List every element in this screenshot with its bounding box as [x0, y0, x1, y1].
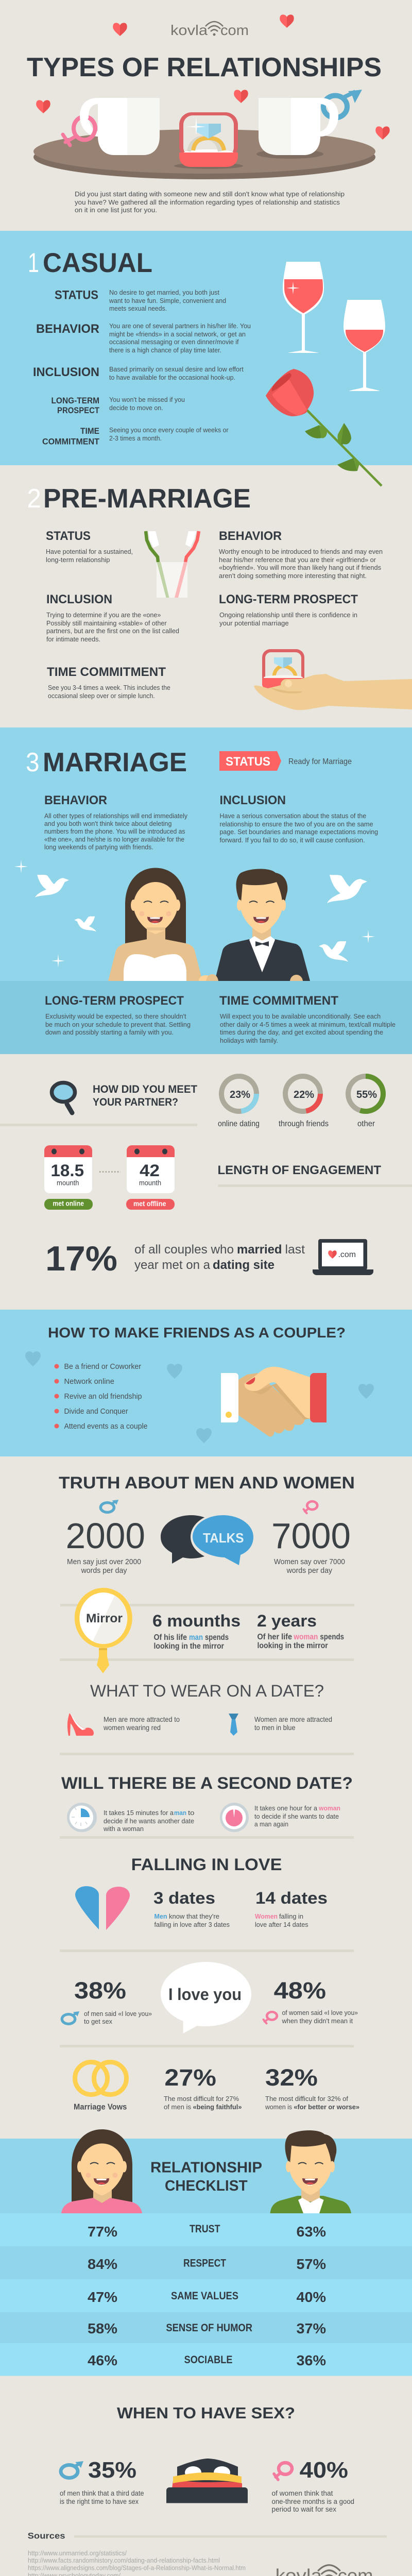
stat: women 7000: Women say over 7000 — [274, 1557, 345, 1566]
casual time commitment: COMMITMENT — [42, 437, 100, 446]
row: sociable: SOCIABLE — [184, 2354, 233, 2366]
label: marriage vows: Marriage Vows — [74, 2103, 127, 2111]
female symbol — [63, 116, 95, 145]
stat: 32%: The most difficult for 32% of — [265, 2095, 348, 2103]
casual long-term prospect: decide to move on. — [109, 404, 163, 412]
icon: split heart — [75, 1886, 130, 1930]
intro text — [75, 190, 345, 214]
row: sense of humor: 37% — [297, 2320, 326, 2336]
marriage inclusion: relationship to ensure the two of you are on the same — [219, 820, 373, 828]
casual inclusion: INCLUSION — [33, 365, 99, 379]
list: ways to make friends: Be a friend or Coworker — [64, 1362, 141, 1371]
bride illustration — [108, 868, 211, 981]
decorative hearts — [36, 14, 390, 140]
donut: through friends 22%: through friends — [279, 1120, 329, 1128]
stat: 32%: «for better or worse» — [294, 2103, 359, 2111]
panel: how to make friends — [0, 1310, 412, 1456]
icon: clock 15 minutes — [67, 1803, 97, 1832]
male symbol — [323, 90, 362, 117]
casual long-term prospect: LONG-TERM — [52, 396, 99, 405]
heading: relationship checklist — [150, 2160, 262, 2194]
speech bubbles: talks — [161, 1513, 255, 1565]
pre-marriage inclusion: Possibly still maintaining «stable» of other — [46, 619, 167, 627]
icon: clock one hour — [220, 1803, 249, 1832]
calendar: met offline: 42 — [140, 1161, 160, 1180]
status tag: Ready for Marriage — [288, 757, 352, 766]
row: trust: TRUST — [190, 2223, 220, 2235]
icon: male small — [100, 1500, 118, 1512]
stat: women 7000: 7000 — [271, 1516, 351, 1556]
sources: http://www.facts.randomhistory.com/dating-and-relationship-facts.html — [28, 2556, 220, 2564]
groom illustration — [206, 869, 310, 981]
pre-marriage inclusion: INCLUSION — [46, 592, 112, 606]
stat: 17% married: 17% — [45, 1239, 117, 1278]
stat: 14 dates: falling in — [279, 1912, 303, 1920]
icon: magnifier — [52, 1083, 75, 1113]
stat: 14 dates — [255, 1889, 328, 1928]
stat: women 48%: 48% — [274, 1977, 326, 2004]
marriage behavior — [44, 793, 187, 851]
logo: kovla.com header: com — [220, 22, 249, 38]
heading: pre-marriage: 2 — [27, 484, 41, 514]
panel: falling in love — [75, 1855, 328, 1930]
text: men attracted to red: women wearing red — [103, 1723, 161, 1732]
text: man 15 minutes: decide if he wants another date — [104, 1817, 194, 1825]
sources — [28, 2531, 387, 2576]
pre-marriage behavior: hear his/her reference that you are their «girlfriend» or — [219, 556, 376, 564]
stat: men 35%: of men think that a third date — [60, 2489, 144, 2497]
casual inclusion — [33, 365, 244, 381]
donut: through friends 22% — [279, 1076, 329, 1128]
pre-marriage behavior: BEHAVIOR — [219, 529, 282, 543]
icon: wine glass full — [283, 262, 324, 353]
casual time commitment — [42, 426, 229, 446]
marriage time commitment: holidays with family. — [220, 1037, 278, 1044]
heading: falling in love: FALLING IN LOVE — [131, 1855, 282, 1874]
logo: kovla.com header — [170, 22, 249, 38]
panel: truth about men and women — [59, 1473, 355, 1575]
pre-marriage behavior: «boyfriend». You will more than likely hang out if friends — [219, 564, 381, 571]
list: ways to make friends: Divide and Conquer — [64, 1407, 128, 1416]
sources: Sources — [28, 2531, 65, 2541]
stat: 3 dates — [153, 1889, 230, 1928]
icon: female small — [304, 1501, 317, 1513]
panel: marriage — [0, 727, 412, 1054]
stat: 14 dates: love after 14 dates — [255, 1921, 308, 1928]
status tag — [219, 751, 352, 771]
row: trust: 63% — [297, 2224, 326, 2240]
marriage time commitment — [219, 994, 396, 1044]
pre-marriage inclusion: partners, but are the first one on the list called — [46, 627, 179, 635]
title: TYPES OF RELATIONSHIPS — [27, 53, 382, 82]
pre-marriage inclusion: Trying to determine if you are the «one» — [46, 611, 161, 619]
donut: other 55%: 55% — [356, 1089, 377, 1100]
man portrait — [270, 2130, 351, 2213]
stat: 2 years: woman — [294, 1633, 318, 1641]
pre-marriage time commitment: See you 3-4 times a week. This includes the — [48, 684, 170, 691]
casual long-term prospect — [52, 396, 185, 415]
marriage behavior: All other types of relationships will end immediately — [44, 812, 187, 820]
pre-marriage time commitment: TIME COMMITMENT — [47, 665, 166, 679]
stat: 6 mounths: Of his life — [153, 1633, 187, 1642]
text: man 15 minutes: to — [188, 1809, 195, 1817]
speech bubble: i love you — [161, 1962, 251, 2033]
stat: 14 dates: 14 dates — [255, 1889, 328, 1907]
icon: laptop — [313, 1239, 373, 1275]
heading: casual: 1 — [28, 248, 39, 278]
donut: online dating 23%: online dating — [218, 1120, 260, 1128]
stat: women 7000 — [271, 1516, 351, 1575]
row: same values: 47% — [88, 2289, 117, 2305]
heading: truth: TRUTH ABOUT MEN AND WOMEN — [59, 1473, 355, 1492]
heading: second date: WILL THERE BE A SECOND DATE? — [61, 1774, 353, 1792]
pre-marriage long-term prospect: Ongoing relationship until there is confidence in — [219, 611, 357, 619]
stat: 3 dates: Men — [154, 1912, 167, 1920]
stat: 6 mounths: spends — [205, 1633, 229, 1642]
icon: bed — [166, 2459, 248, 2503]
stat: men 38% — [62, 1977, 152, 2025]
casual status: STATUS — [55, 289, 98, 302]
stat: 27%: The most difficult for 27% — [164, 2095, 239, 2103]
stat: 27%: «being faithful» — [193, 2103, 242, 2111]
pre-marriage time commitment: occasional sleep over or simple lunch. — [48, 692, 155, 700]
casual status: want to have fun. Simple, convenient and — [109, 297, 226, 304]
pre-marriage long-term prospect — [219, 592, 358, 627]
stat: women 48%: of women said «I love you» — [282, 2009, 358, 2016]
marriage inclusion: forward. If you fail to do so, it will cause confusion. — [219, 836, 365, 844]
stat: 6 mounths — [152, 1612, 241, 1651]
marriage time commitment: other daily or 4-5 times a week at minimum, text/call multiple — [220, 1021, 396, 1028]
stat: 27% — [164, 2064, 242, 2111]
icon: toothbrushes in glass — [146, 531, 199, 598]
casual time commitment: 2-3 times a month. — [109, 434, 162, 442]
text: man 15 minutes: man — [174, 1809, 186, 1817]
woman portrait — [61, 2129, 142, 2213]
text: woman one hour: woman — [318, 1804, 340, 1812]
pre-marriage behavior: aren't doing something more interesting that night. — [219, 572, 367, 580]
calendar: met online: 18.5 — [50, 1161, 84, 1180]
row: same values: SAME VALUES — [171, 2290, 238, 2302]
text: woman one hour — [254, 1804, 340, 1828]
pre-marriage inclusion: for intimate needs. — [46, 635, 100, 643]
sources: http://www.unmarried.org/statistics/ — [28, 2549, 127, 2557]
intro text: you have? We gathered all the information regarding types of relationship and statistics — [75, 198, 340, 206]
pre-marriage long-term prospect: LONG-TERM PROSPECT — [219, 592, 358, 606]
text: men attracted to red — [103, 1715, 180, 1732]
speech bubbles: talks: TALKS — [203, 1530, 244, 1546]
marriage time commitment: TIME COMMITMENT — [219, 994, 338, 1008]
stat: 32% — [265, 2064, 359, 2111]
marriage inclusion: Have a serious conversation about the status of the — [219, 812, 366, 820]
row: sense of humor: SENSE OF HUMOR — [166, 2322, 252, 2334]
panel: pre-marriage — [27, 484, 412, 710]
icon: blue tie — [229, 1714, 238, 1736]
stat: 27%: 27% — [164, 2064, 216, 2091]
stat: women 40%: one-three months is a good — [272, 2498, 354, 2505]
pre-marriage status — [46, 529, 133, 564]
stat: 32%: 32% — [265, 2064, 318, 2091]
heading: make friends: HOW TO MAKE FRIENDS AS A COUPLE? — [48, 1325, 346, 1341]
pre-marriage status: long-term relationship — [46, 556, 110, 564]
marriage behavior: numbers from the phone. You will be introduced as — [44, 827, 185, 835]
stat: men 2000: 2000 — [66, 1516, 145, 1556]
row: sense of humor — [0, 2312, 412, 2343]
marriage time commitment: Will expect you to be available unconditionally. See each — [220, 1012, 381, 1020]
panel: how did you meet — [0, 1076, 383, 1128]
marriage inclusion: INCLUSION — [219, 793, 286, 807]
pre-marriage inclusion — [46, 592, 179, 643]
stat: men 2000 — [66, 1516, 145, 1575]
marriage behavior: long weekends of partying with friends. — [44, 843, 153, 851]
text: woman one hour: It takes one hour for a — [254, 1804, 318, 1812]
icon: mirror — [75, 1588, 134, 1673]
heading: relationship checklist: CHECKLIST — [165, 2178, 248, 2194]
heading: how did you meet: HOW DID YOU MEET — [93, 1083, 197, 1095]
text: men attracted to red: Men are more attracted to — [104, 1715, 180, 1723]
pre-marriage status: Have potential for a sustained, — [46, 548, 133, 555]
row: sociable — [0, 2343, 412, 2376]
stat: 27%: of men is — [164, 2103, 191, 2111]
marriage long-term prospect: Exclusivity would be expected, so there shouldn't — [45, 1012, 186, 1020]
calendar: met offline: met offline — [133, 1199, 166, 1208]
pre-marriage long-term prospect: your potential marriage — [219, 619, 289, 627]
stat: women 48% — [264, 1977, 358, 2025]
stat: 6 mounths: man — [189, 1633, 203, 1642]
marriage time commitment: times during the day, and get excited about spending the — [220, 1028, 383, 1036]
heading: relationship checklist: RELATIONSHIP — [150, 2160, 262, 2176]
stat: 3 dates: falling in love after 3 dates — [154, 1921, 230, 1928]
intro text: on it in one list just for you. — [75, 206, 157, 214]
icon: hand holding ring box — [254, 649, 412, 710]
row: trust — [0, 2213, 412, 2246]
panel: relationship checklist — [0, 2129, 412, 2376]
text: woman one hour: a man again — [254, 1820, 288, 1828]
faint hearts — [25, 1351, 374, 1443]
stat: 3 dates: know that they're — [169, 1912, 219, 1920]
pre-marriage behavior — [219, 529, 383, 580]
stat: 14 dates: Women — [255, 1912, 278, 1920]
sources: https://www.alignedsigns.com/blog/Stages-of-a-Relationship-What-is-Normal.htm — [28, 2564, 246, 2572]
pre-marriage behavior: Worthy enough to be introduced to friends and may even — [219, 548, 383, 555]
casual behavior: occasional messaging or even dinner/movie if — [109, 338, 239, 346]
row: sociable: 36% — [297, 2352, 326, 2368]
casual behavior: might be «friends» in a social network, or get an — [109, 330, 246, 338]
donut: other 55% — [348, 1076, 383, 1128]
casual behavior: You are one of several partners in his/her life. You — [109, 322, 251, 330]
panel: marriage vows — [74, 2062, 359, 2111]
dotted connector — [99, 1171, 121, 1173]
table — [33, 129, 375, 179]
heading: casual: CASUAL — [43, 248, 152, 278]
list: ways to make friends: Attend events as a couple — [64, 1422, 147, 1431]
stat: 2 years: looking in the mirror — [258, 1641, 328, 1650]
icon: wine glass half — [344, 300, 385, 391]
panel: length of engagement — [44, 1145, 412, 1210]
stat: 17% married — [45, 1239, 373, 1278]
stat: 6 mounths: looking in the mirror — [153, 1642, 224, 1651]
row: same values — [0, 2279, 412, 2312]
row: respect: 84% — [88, 2256, 117, 2272]
casual time commitment: Seeing you once every couple of weeks or — [109, 426, 229, 434]
stat: women 7000: words per day — [286, 1566, 332, 1575]
illustration: table with mugs and ring — [33, 90, 375, 179]
calendar: met online: mounth — [57, 1179, 79, 1187]
text: man 15 minutes: with a woman — [103, 1825, 144, 1833]
donut: other 55%: other — [357, 1120, 375, 1128]
text: man 15 minutes — [103, 1809, 195, 1833]
panel: casual — [0, 231, 412, 465]
stat: 17% married: last — [285, 1243, 305, 1257]
text: women attracted to blue — [254, 1715, 332, 1732]
heading: marriage: 3 — [26, 748, 39, 777]
logo: kovla.com header: kovla — [170, 22, 208, 38]
casual status — [55, 289, 226, 312]
icon: red shoe — [67, 1713, 94, 1736]
heading: how did you meet: YOUR PARTNER? — [93, 1096, 178, 1108]
stat: men 38%: of men said «I love you» — [84, 2010, 152, 2018]
right mug — [256, 98, 338, 159]
donut: online dating 23%: 23% — [230, 1089, 250, 1100]
pre-marriage time commitment — [47, 665, 170, 700]
panel: what to wear — [67, 1682, 332, 1736]
casual status: meets sexual needs. — [109, 304, 167, 312]
row: same values: 40% — [297, 2289, 326, 2305]
stat: men 35%: is the right time to have sex — [60, 2498, 139, 2505]
marriage behavior: «the one», and he/she is no longer available for the — [44, 836, 184, 843]
stat: 17% married: year met on a — [134, 1258, 211, 1272]
casual long-term prospect: You won't be missed if you — [109, 396, 185, 403]
stat: 3 dates: 3 dates — [153, 1889, 215, 1907]
logo: kovla.com footer — [276, 2565, 373, 2576]
heading: what to wear: WHAT TO WEAR ON A DATE? — [90, 1682, 324, 1700]
icon: rose — [266, 369, 382, 486]
doves and sparkles — [14, 860, 375, 968]
list: ways to make friends: Revive an old friendship — [64, 1392, 142, 1401]
heading: when to have sex: WHEN TO HAVE SEX? — [117, 2404, 295, 2422]
calendar: met online — [44, 1145, 93, 1210]
heading: marriage: MARRIAGE — [43, 748, 187, 777]
marriage long-term prospect: LONG-TERM PROSPECT — [45, 994, 184, 1008]
list: ways to make friends — [55, 1362, 147, 1431]
row: sociable: 46% — [88, 2352, 117, 2368]
casual long-term prospect: PROSPECT — [57, 405, 100, 415]
stat: women 40%: 40% — [300, 2458, 348, 2483]
stat: 6 mounths: 6 mounths — [152, 1612, 241, 1630]
panel: second date — [61, 1774, 353, 1833]
marriage long-term prospect — [45, 994, 191, 1036]
calendar: met online: met online — [53, 1199, 84, 1208]
panel: mirror — [75, 1588, 344, 1673]
marriage inclusion — [219, 793, 378, 844]
casual behavior — [36, 322, 251, 354]
calendar: met offline — [126, 1145, 175, 1210]
stat: men 2000: words per day — [81, 1566, 127, 1575]
donut: through friends 22%: 22% — [294, 1089, 314, 1100]
row: respect: RESPECT — [183, 2258, 226, 2269]
heading: how did you meet — [93, 1083, 197, 1108]
stat: 17% married: of all couples who — [134, 1243, 234, 1257]
text: women attracted to blue: to men in blue — [254, 1723, 296, 1732]
speech bubble: i love you: I love you — [168, 1985, 242, 2004]
list: ways to make friends: Network online — [64, 1377, 114, 1386]
stat: 2 years: spends — [320, 1633, 344, 1641]
marriage long-term prospect: down and possibly starting a family with you. — [45, 1028, 174, 1036]
stat: women 40%: of women think that — [272, 2489, 333, 2497]
donut: online dating 23% — [218, 1076, 260, 1128]
row: respect: 57% — [297, 2256, 326, 2272]
casual behavior: there is a high chance of play time later. — [109, 346, 221, 354]
casual time commitment: TIME — [80, 426, 99, 436]
stat: men 38%: 38% — [74, 1977, 126, 2004]
left mug — [80, 98, 160, 155]
stat: 2 years — [257, 1612, 344, 1650]
stat: women 40%: period to wait for sex — [272, 2505, 336, 2513]
stat: 2 years: Of her life — [258, 1633, 292, 1641]
stat: 2 years: 2 years — [257, 1612, 317, 1630]
icon: laptop: .com — [338, 1250, 356, 1259]
text: women attracted to blue: Women are more attracted — [254, 1715, 332, 1723]
calendar: met offline: mounth — [139, 1179, 161, 1187]
stat: women 48%: when they didn't mean it — [282, 2017, 353, 2025]
casual status: No desire to get married, you both just — [109, 289, 219, 296]
pre-marriage status: STATUS — [46, 529, 91, 543]
casual behavior: BEHAVIOR — [36, 322, 99, 336]
icon: wedding rings — [75, 2062, 127, 2095]
text: woman one hour: to decide if she wants to date — [254, 1812, 339, 1820]
stat: men 2000: Men say just over 2000 — [67, 1557, 141, 1566]
row: sense of humor: 58% — [88, 2320, 117, 2336]
intro text: Did you just start dating with someone new and still don't know what type of relationship — [75, 190, 345, 198]
heading: pre-marriage: PRE-MARRIAGE — [43, 484, 251, 514]
heading: length of engagement: LENGTH OF ENGAGEMENT — [217, 1163, 381, 1177]
panel: when to have sex — [60, 2404, 354, 2513]
marriage behavior: and you both won't think twice about deleting — [44, 820, 171, 827]
row: respect — [0, 2246, 412, 2279]
marriage inclusion: page. Set boundaries and manage expectations moving — [219, 828, 378, 836]
status tag: STATUS — [226, 755, 270, 769]
casual inclusion: Based primarily on sexual desire and low effort — [109, 365, 244, 373]
icon: mirror: Mirror — [86, 1612, 123, 1625]
stat: men 35% — [60, 2458, 144, 2505]
text: man 15 minutes: It takes 15 minutes for a — [104, 1809, 174, 1817]
stat: men 38%: to get sex — [84, 2018, 112, 2025]
stat: women 40% — [272, 2458, 354, 2513]
panel: i love you — [62, 1962, 358, 2033]
stat: 17% married: dating site — [213, 1258, 274, 1272]
marriage behavior: BEHAVIOR — [44, 793, 107, 807]
stat: 32%: women is — [265, 2103, 292, 2111]
marriage long-term prospect: be much on your schedule to prevent that. Settling — [45, 1021, 191, 1028]
stat: 17% married: married — [237, 1243, 282, 1257]
female ring overlap — [89, 117, 95, 139]
stat: men 35%: 35% — [88, 2458, 136, 2483]
icon: handshake — [221, 1367, 327, 1437]
row: trust: 77% — [88, 2224, 117, 2240]
casual inclusion: to have available for the occasional hook-up. — [109, 374, 235, 381]
ring box — [174, 112, 243, 169]
